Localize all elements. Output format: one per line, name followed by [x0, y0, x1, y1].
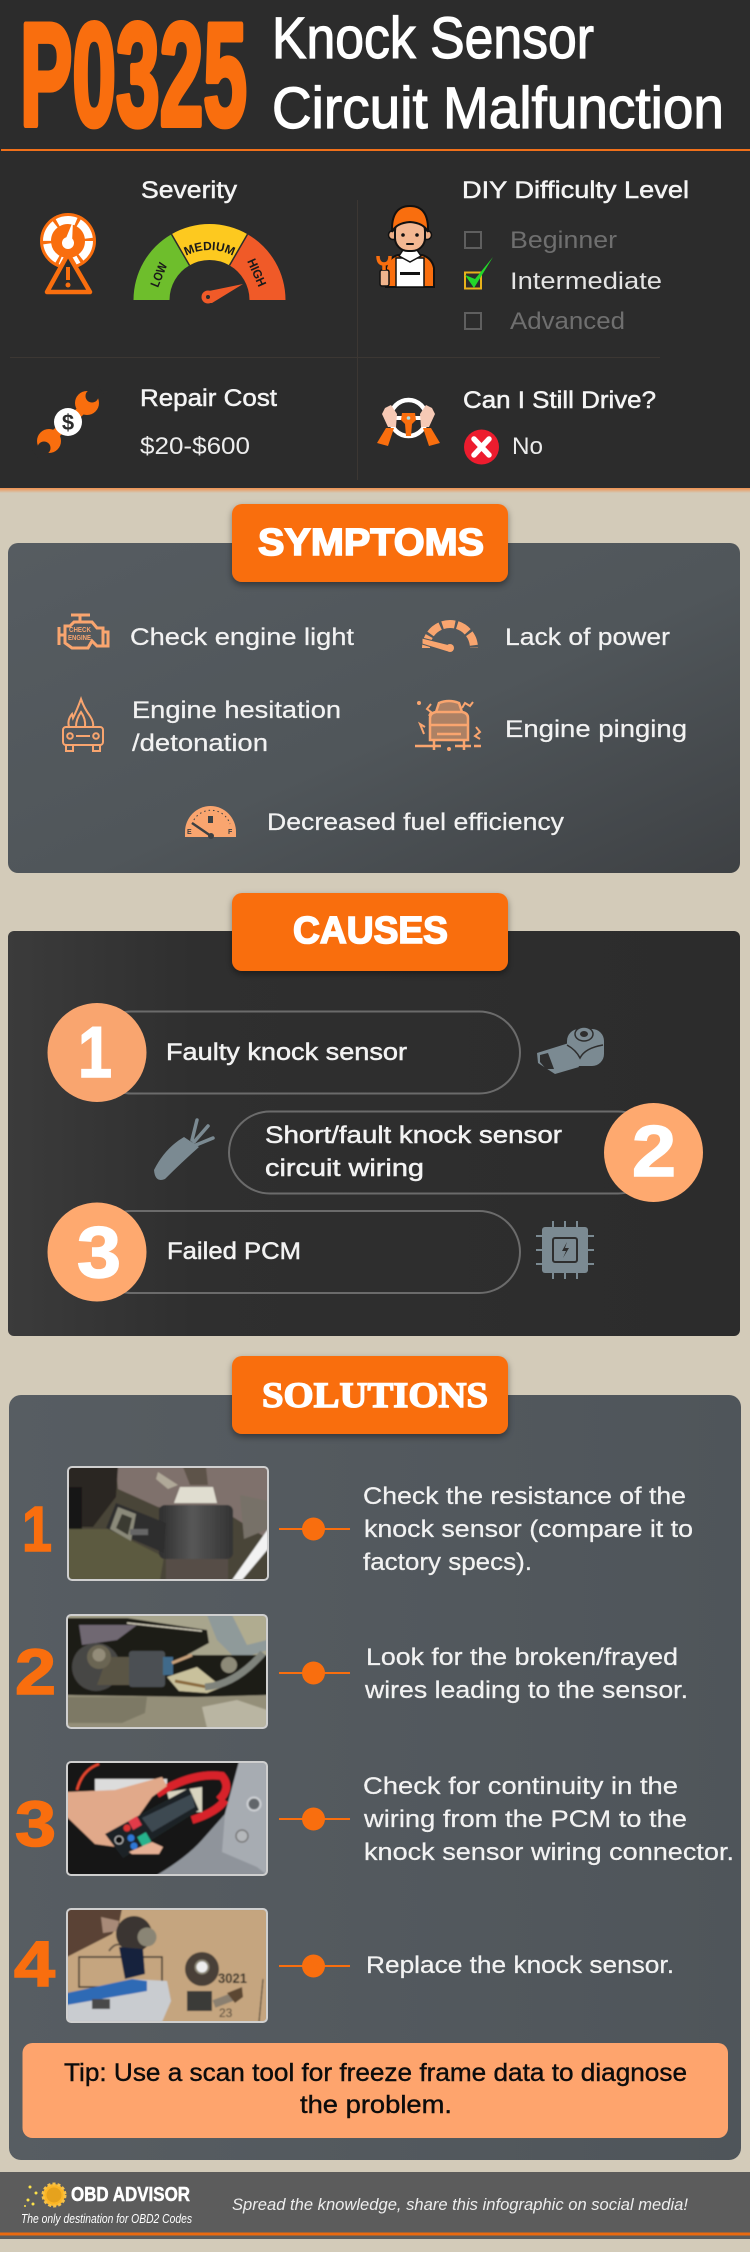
step 3 text: Check for continuity in the: [363, 1773, 678, 1800]
drive answer: No: [512, 433, 543, 460]
option: advanced: [465, 308, 625, 335]
cause 2: [229, 1103, 703, 1202]
severity gauge: [134, 224, 286, 304]
step 4 number: 4: [14, 1928, 55, 2000]
symptom text: [132, 697, 341, 757]
step 2 text: [364, 1644, 688, 1704]
footer: [0, 2172, 750, 2239]
severity gauge: LOW: [148, 261, 170, 289]
icon: fuel gauge: [185, 806, 236, 839]
header panel: [0, 0, 750, 492]
panel: causes: [8, 893, 740, 1336]
heading: symptoms: [232, 504, 508, 582]
heading: causes: CAUSES: [293, 910, 448, 952]
step 1 text: [363, 1483, 693, 1576]
step 1 text: Check the resistance of the: [363, 1483, 686, 1510]
symptom text: /detonation: [132, 730, 268, 757]
option: intermediate: [465, 257, 662, 295]
icon: mechanic: [378, 206, 434, 287]
icon: power gauge: [422, 624, 474, 652]
repair cost value: $20-$600: [140, 433, 250, 460]
step 1 text: knock sensor (compare it to: [364, 1516, 693, 1543]
step 3 connector: [279, 1808, 350, 1830]
cause 1: Faulty knock sensor: [166, 1039, 407, 1066]
icon: chip: [536, 1221, 594, 1279]
step 3 text: knock sensor wiring connector.: [364, 1839, 734, 1866]
title line 2: Circuit Malfunction: [272, 76, 724, 141]
step 1 number: 1: [22, 1493, 52, 1565]
icon: fuel gauge: E: [187, 829, 192, 836]
step 1 text: factory specs).: [363, 1549, 532, 1576]
step 3 text: [363, 1773, 734, 1866]
step 4 photo: 23: [219, 2006, 233, 2020]
icon: burning car: [63, 699, 103, 751]
step 4 photo: [67, 1909, 267, 2022]
step 1 photo: [68, 1467, 268, 1580]
step 4 text: Replace the knock sensor.: [366, 1952, 674, 1979]
option: intermediate: Intermediate: [510, 268, 662, 295]
logo: The only destination for OBD2 Codes: [21, 2211, 192, 2226]
step 2 connector: [279, 1662, 350, 1684]
cause 2: Short/fault knock sensor: [265, 1122, 562, 1149]
symptom text: Lack of power: [505, 624, 670, 651]
option: beginner: Beginner: [510, 227, 617, 254]
tip callout: [22, 2043, 728, 2138]
cause 2: 2: [632, 1112, 676, 1192]
symptom text: Engine hesitation: [132, 697, 341, 724]
cause 1: [48, 1003, 520, 1102]
icon: check engine: ENGINE: [68, 633, 91, 642]
cause 2: circuit wiring: [265, 1155, 424, 1182]
logo: [21, 2184, 192, 2226]
icon: wire: [154, 1120, 213, 1180]
step 4 connector: [279, 1954, 350, 1978]
heading: causes: [232, 893, 508, 971]
option: beginner: [465, 227, 617, 254]
icon: wrench dollar: [32, 386, 104, 458]
cause 3: 3: [77, 1213, 121, 1293]
severity gauge: HIGH: [244, 257, 269, 289]
symptom text: Decreased fuel efficiency: [267, 809, 564, 836]
panel: solutions: [9, 1356, 741, 2160]
drive heading: Can I Still Drive?: [463, 387, 656, 414]
share message: Spread the knowledge, share this infographic on social media!: [232, 2195, 688, 2214]
symptom text: Engine pinging: [505, 716, 687, 743]
icon: wrench dollar: $: [62, 410, 74, 435]
step 2 photo: [67, 1615, 267, 1728]
step 4 photo: 3021: [218, 1970, 247, 1986]
panel: symptoms: [8, 504, 740, 873]
heading: solutions: SOLUTIONS: [262, 1375, 488, 1415]
icon: red x: [464, 430, 499, 464]
icon: check engine: CHECK: [69, 625, 91, 634]
icon: steering wheel: [377, 400, 440, 446]
icon: knock sensor: [537, 1027, 604, 1074]
step 3 text: wiring from the PCM to the: [363, 1806, 687, 1833]
symptom text: Check engine light: [130, 624, 354, 651]
severity heading: Severity: [141, 177, 237, 204]
title line 1: Knock Sensor: [272, 6, 594, 71]
step 2 text: Look for the broken/frayed: [366, 1644, 678, 1671]
icon: fuel gauge: F: [228, 829, 233, 836]
icon: speedometer warning: [40, 213, 96, 292]
cause 1: 1: [78, 1013, 112, 1093]
cause 3: Failed PCM: [167, 1238, 301, 1265]
heading: solutions: [232, 1356, 508, 1434]
heading: symptoms: SYMPTOMS: [258, 522, 484, 564]
step 1 connector: [279, 1518, 350, 1540]
step 2 text: wires leading to the sensor.: [364, 1677, 688, 1704]
severity gauge: MEDIUM: [184, 242, 236, 256]
step 3 number: 3: [15, 1788, 56, 1860]
cause 3: [48, 1202, 520, 1302]
difficulty heading: DIY Difficulty Level: [462, 177, 689, 204]
option: advanced: Advanced: [510, 308, 625, 335]
tip callout: the problem.: [300, 2091, 452, 2119]
tip callout: Tip: Use a scan tool for freeze frame data to diagnose: [64, 2059, 687, 2087]
icon: check engine: [59, 615, 108, 648]
step 3 photo: [67, 1762, 267, 1875]
repair cost heading: Repair Cost: [140, 385, 277, 412]
icon: vibrating car: [415, 701, 483, 750]
logo: OBD ADVISOR: [71, 2184, 190, 2206]
step 2 number: 2: [15, 1636, 56, 1708]
